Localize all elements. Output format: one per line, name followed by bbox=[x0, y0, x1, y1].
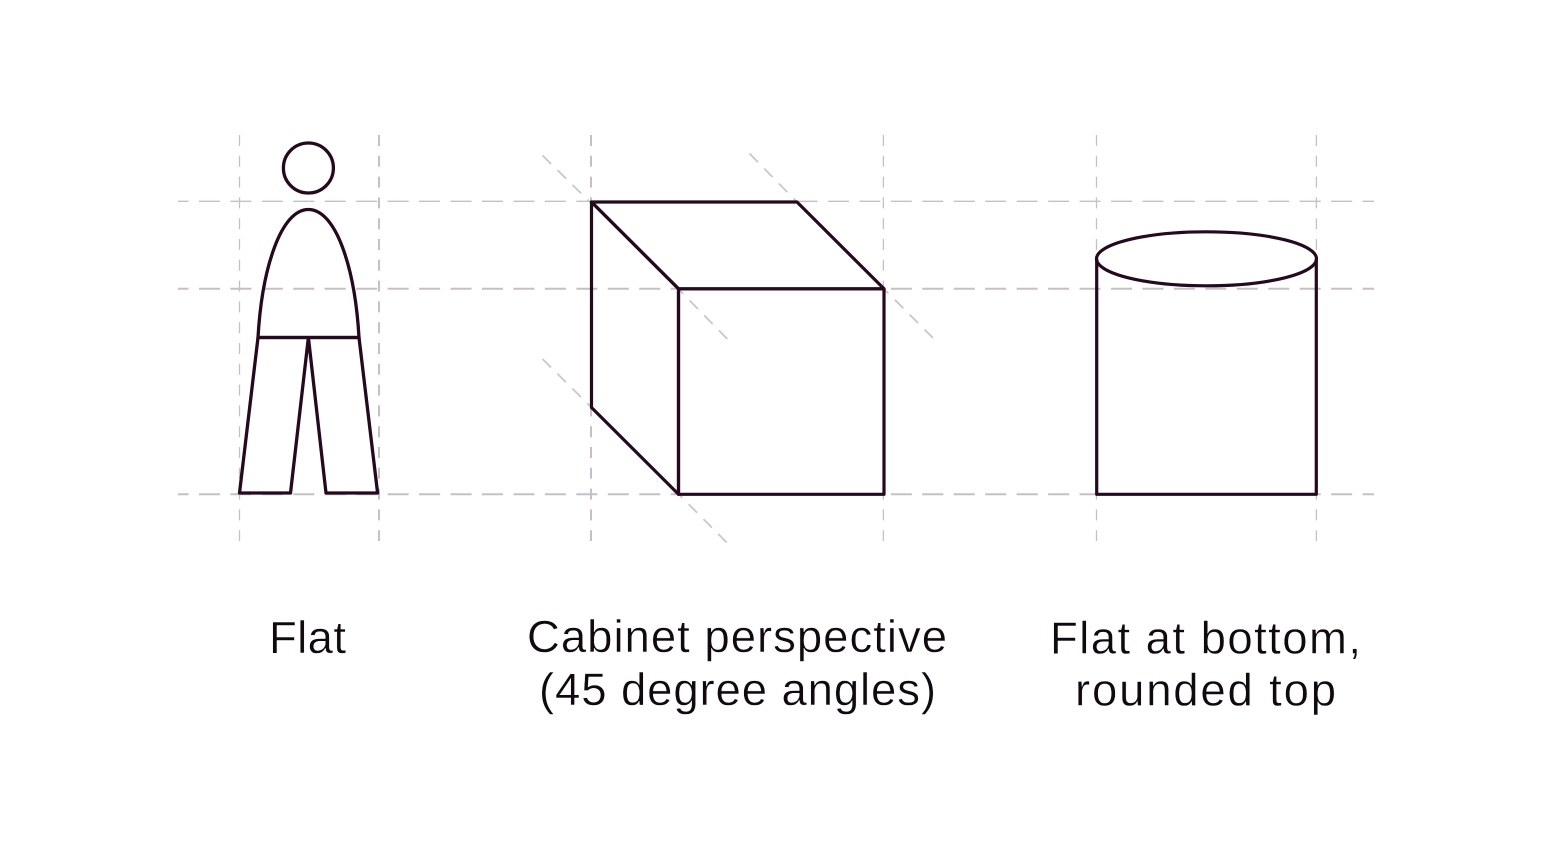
icon: cabinet perspective cube bbox=[592, 202, 884, 494]
label: cabinet perspective: Cabinet perspective bbox=[527, 611, 947, 662]
label: cabinet perspective: (45 degree angles) bbox=[539, 664, 936, 715]
label: flat at bottom, rounded top bbox=[1050, 612, 1361, 716]
label: flat at bottom, rounded top: rounded top bbox=[1075, 664, 1336, 716]
label: flat: Flat bbox=[269, 612, 346, 663]
label: cabinet perspective bbox=[527, 611, 947, 715]
icon: cylinder bbox=[1096, 232, 1316, 494]
icon: flat person bbox=[240, 143, 378, 493]
label: flat at bottom, rounded top: Flat at bottom, bbox=[1050, 612, 1361, 664]
